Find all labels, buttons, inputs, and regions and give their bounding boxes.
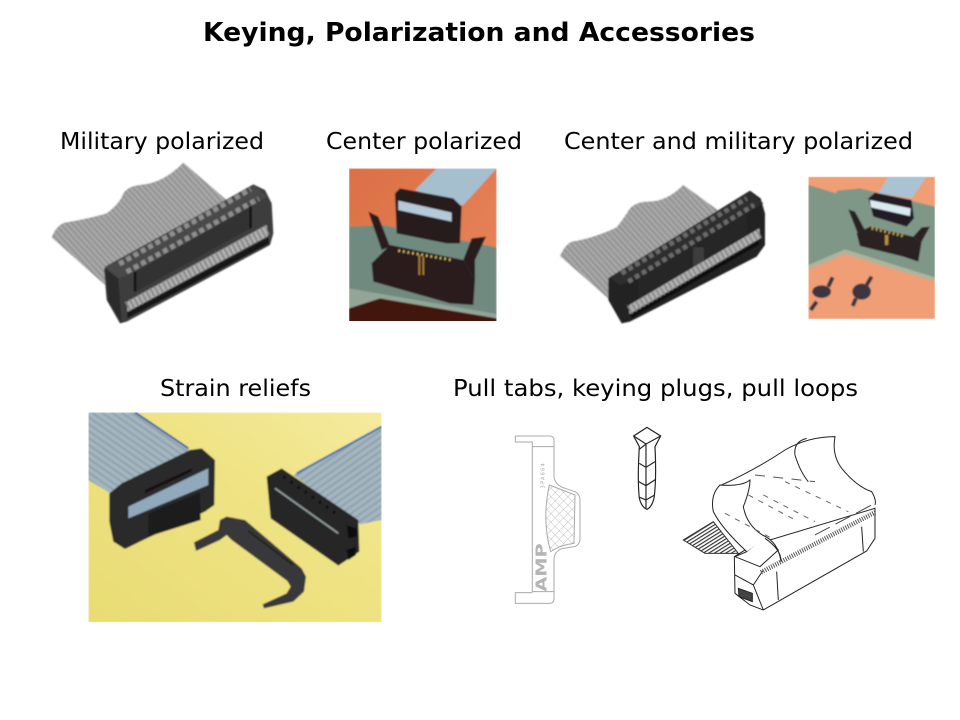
label: pull tabs, keying plugs, pull loops: Pull tabs, keying plugs, pull loops bbox=[453, 376, 858, 402]
photo: center and military polarized, board and keying plugs bbox=[808, 177, 935, 319]
text on pull tab: part number: 3PA664 bbox=[540, 463, 546, 488]
connector body bbox=[734, 508, 875, 610]
photo: center and military polarized connector bbox=[560, 185, 765, 323]
icon: pull loop line drawing bbox=[683, 437, 875, 610]
label: center polarized: Center polarized bbox=[326, 129, 522, 155]
ribbon end bbox=[683, 522, 738, 553]
photo: military polarized connector bbox=[52, 163, 273, 323]
icon: pull tab line drawing bbox=[515, 436, 580, 603]
text on pull tab: AMP: AMP bbox=[534, 543, 551, 592]
loop bbox=[712, 480, 781, 562]
photo: center polarized connector bbox=[349, 168, 497, 323]
label: center and military polarized: Center and military polarized bbox=[564, 129, 913, 155]
title: Keying, Polarization and Accessories bbox=[203, 18, 755, 48]
icon: keying plug line drawing bbox=[634, 427, 661, 509]
label: military polarized: Military polarized bbox=[60, 129, 264, 155]
photo: strain reliefs bbox=[88, 412, 382, 622]
label: strain reliefs: Strain reliefs bbox=[160, 376, 311, 402]
